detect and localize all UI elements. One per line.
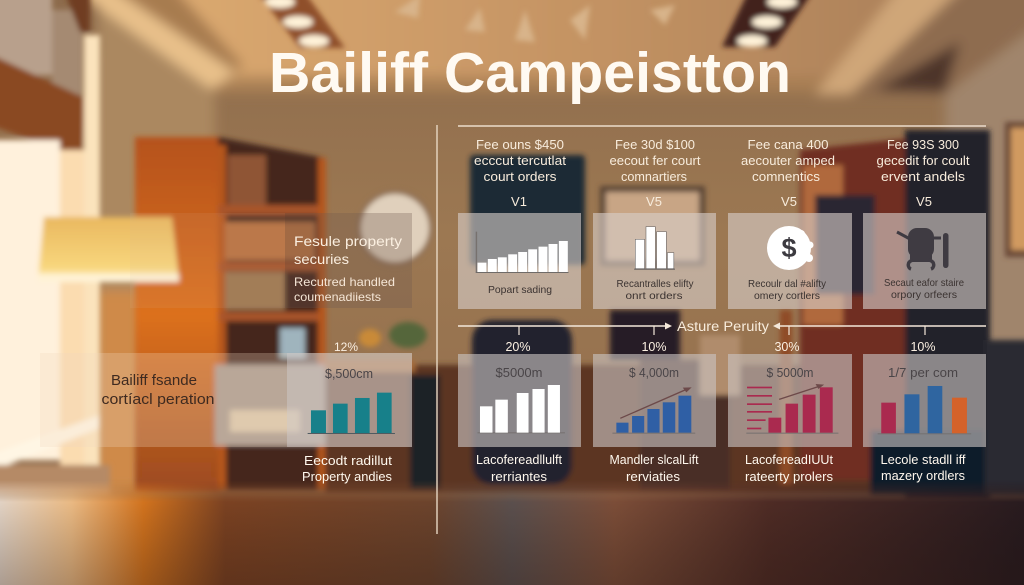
panel: bottom card 1: [458, 340, 581, 484]
panel: bottom card 3: rateerty prolers: [745, 470, 833, 484]
panel: bottom card 2: rerviaties: [626, 470, 680, 484]
column 4 header: V5: [916, 194, 932, 209]
column 1 header: [474, 137, 566, 209]
panel: left label band: Bailiff fsande: [111, 373, 197, 389]
panel: left upper band: [130, 213, 412, 308]
column 4 header: Fee 93S 300: [887, 137, 959, 152]
icon: dark robot figure: [897, 228, 948, 269]
floor: [0, 480, 1024, 585]
panel: left label band: [40, 353, 287, 447]
panel: top card 1: Popart sading: [488, 284, 552, 296]
column 3 header: Fee cana 400: [748, 137, 828, 152]
panel: left upper band: coumenadiiests: [294, 290, 381, 304]
panel: left chart card: [287, 340, 412, 484]
panel: bottom card 2: Mandler slcalLift: [610, 453, 699, 467]
panel: bottom card 4: [863, 340, 986, 483]
bookshelf: [135, 137, 220, 492]
column 2 header: V5: [646, 194, 662, 209]
panel: top card 2: [593, 213, 716, 309]
bar chart: histogram: [634, 227, 675, 270]
bar chart: crimson with list lines: [746, 384, 838, 434]
left divider line: [436, 125, 438, 534]
wall clock: [357, 190, 433, 266]
column 1 header: Fee ouns $450: [476, 137, 564, 152]
panel: left chart card: Property andies: [302, 470, 392, 484]
panel: top card 3: Recoulr dal #alifty: [748, 278, 827, 290]
column 2 header: eecout fer court: [610, 153, 701, 168]
panel: top card 3: [728, 213, 852, 309]
panel: bottom card 2: $ 4,000m: [629, 366, 679, 380]
panel: bottom card 3: $ 5000m: [766, 366, 814, 380]
panel: bottom card 1: $5000m: [496, 366, 542, 380]
icon: dollar coin: $: [781, 233, 797, 263]
column 2 header: [610, 137, 701, 209]
column 2 header: comnartiers: [621, 169, 687, 184]
panel: bottom card 3: LacofereadIUUt: [745, 453, 834, 467]
column 4 header: ervent andels: [881, 169, 966, 184]
title: Bailiff Campeistton: [269, 41, 791, 105]
panel: bottom card 4: Lecole stadll iff: [880, 453, 966, 467]
panel: bottom card 3: 30%: [774, 340, 800, 354]
column 1 header: court orders: [484, 169, 557, 184]
column 3 header: [741, 137, 835, 209]
panel: top card 2: Recantralles elifty: [616, 278, 694, 290]
panel: bottom card 1: 20%: [505, 340, 531, 354]
panel: bottom card 3: [728, 340, 852, 484]
column 1 header: V1: [511, 194, 527, 209]
column 4 header: gecedit for coult: [876, 153, 970, 168]
plant: [389, 322, 427, 348]
panel: top card 4: [863, 213, 986, 309]
panel: bottom card 4: mazery ordlers: [881, 469, 965, 483]
column 2 header: Fee 30d $100: [615, 137, 695, 152]
lamp: [38, 217, 179, 280]
panel: top card 2: onrt orders: [626, 290, 682, 302]
column 3 header: V5: [781, 194, 797, 209]
panel: bottom card 4: 10%: [910, 340, 936, 354]
column 1 header: ecccut tercutlat: [474, 153, 566, 168]
bar chart: white rising: [476, 232, 569, 273]
bar chart: blue with trend arrow: [612, 387, 695, 434]
bar chart: teal: [308, 393, 395, 434]
panel: left label band: cortíacl peration: [102, 392, 214, 408]
panel: bottom card 2: [593, 340, 716, 484]
column 3 header: comnentics: [752, 169, 821, 184]
axis with arrows and label: Asture Peruity: [677, 319, 769, 334]
panel: left chart card: 12%: [334, 340, 358, 354]
top rule: [458, 125, 986, 127]
panel: bottom card 1: Lacofereadllulft: [476, 453, 563, 467]
panel: top card 1: [458, 213, 581, 309]
panel: top card 4: orpory orfeers: [891, 289, 957, 301]
panel: bottom card 1: rerriantes: [491, 470, 547, 484]
panel: bottom card 4: 1/7 per com: [888, 366, 958, 380]
panel: left chart card: $,500cm: [325, 367, 373, 381]
panel: left chart card: Eecodt radillut: [304, 454, 393, 468]
axis with arrows and label: [458, 319, 986, 335]
panel: top card 4: Secaut eafor staire: [884, 277, 964, 289]
panel: bottom card 2: 10%: [641, 340, 667, 354]
desk and dark objects: [325, 365, 1024, 493]
bar chart: white: [477, 385, 565, 433]
column 4 header: [876, 137, 970, 209]
panel: top card 3: omery cortlers: [754, 290, 820, 302]
bar chart: mixed colours: [878, 386, 971, 434]
panel: left upper band: Fesule property: [294, 234, 402, 249]
panel: left upper band: securies: [294, 252, 349, 267]
column 3 header: aecouter amped: [741, 153, 835, 168]
panel: left upper band: Recutred handled: [294, 275, 395, 289]
